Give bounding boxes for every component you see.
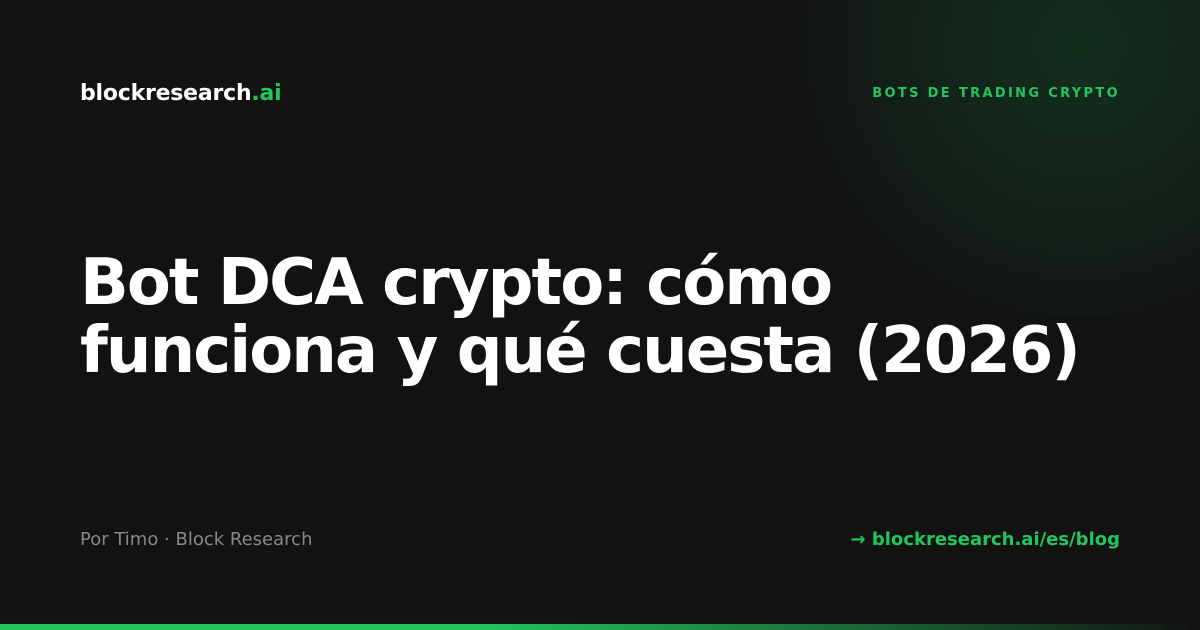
author line: Por Timo · Block Research	[80, 529, 312, 550]
bottom accent bar	[0, 624, 1200, 630]
category tag: BOTS DE TRADING CRYPTO	[872, 86, 1120, 101]
title	[80, 246, 1079, 388]
blog link: → blockresearch.ai/es/blog	[851, 529, 1120, 550]
title: funciona y qué cuesta (2026)	[80, 314, 1079, 388]
brand logo: blockresearch.ai	[80, 81, 282, 106]
title: Bot DCA crypto: cómo	[80, 246, 831, 320]
background glow	[760, 0, 1200, 315]
